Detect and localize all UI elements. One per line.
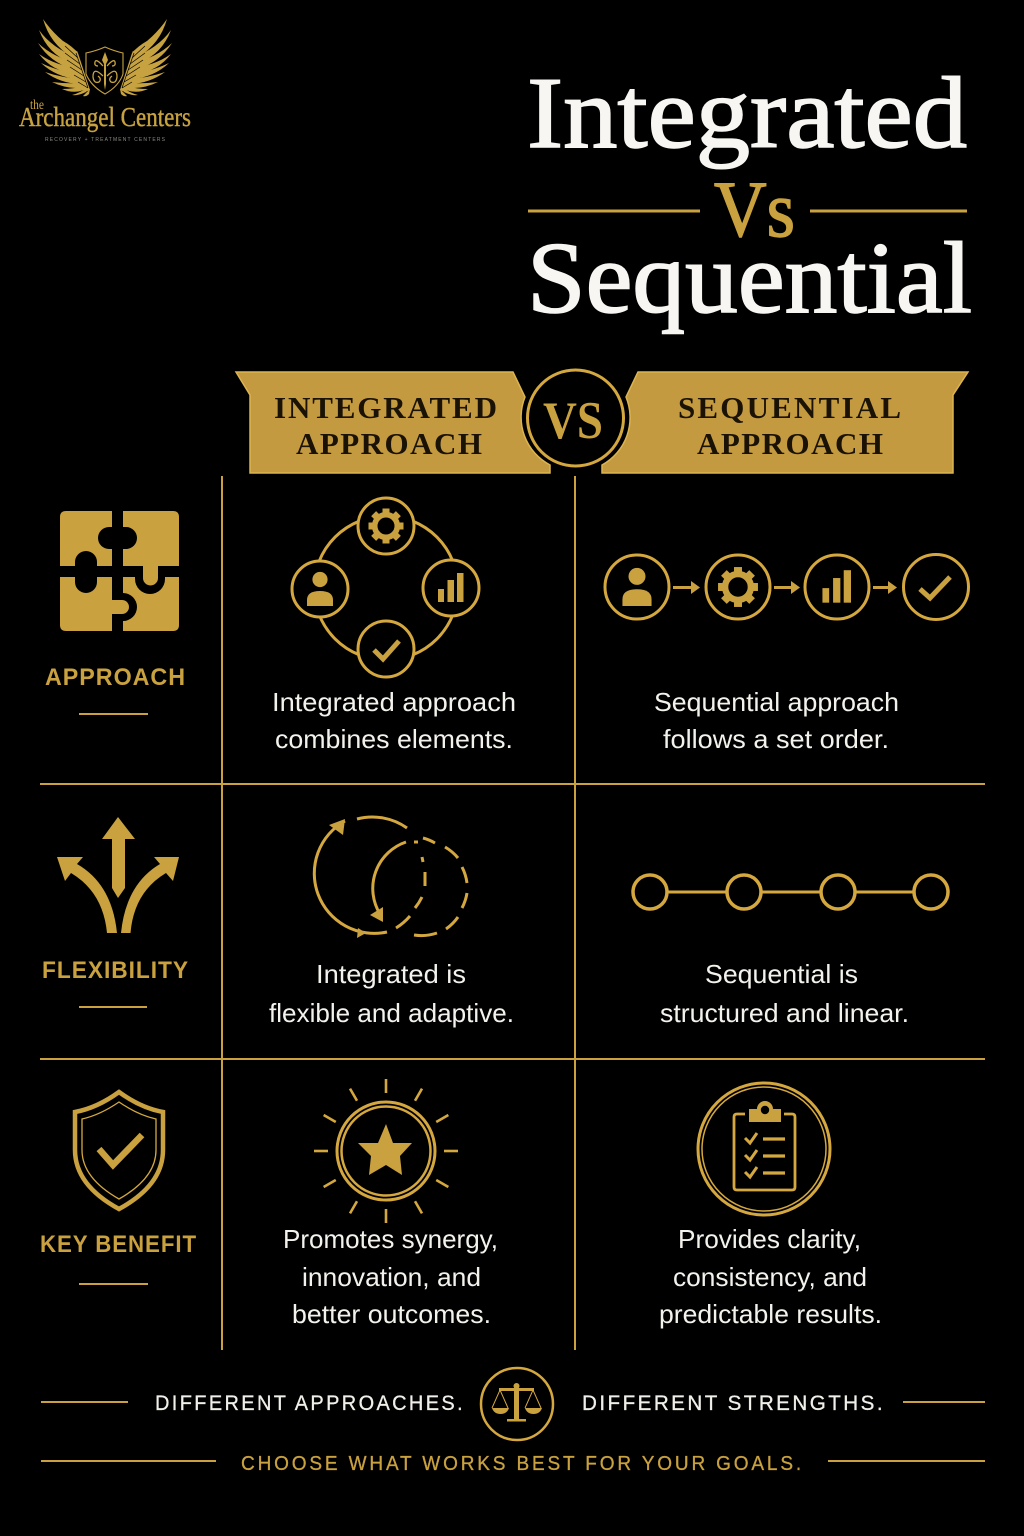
cell: sequential approach [605,554,968,754]
cell text: combines elements. [275,724,513,754]
label text: APPROACH [45,664,186,691]
cell: integrated benefit [283,1079,498,1329]
icon: radiant star [314,1079,458,1223]
header banner: sequential approach [602,372,968,473]
icon: shield with check [75,1092,163,1209]
cell text: Integrated approach [272,687,516,717]
icon: puzzle [60,511,179,631]
icon: clipboard checklist [698,1083,830,1215]
title word: Vs: Vs [714,167,795,254]
row label: approach [45,511,186,714]
logo: The Archangel Centers [19,19,191,143]
cell: sequential benefit [659,1083,882,1329]
cell text [272,687,516,754]
cell text: Integrated is [316,959,466,989]
cell text: predictable results. [659,1299,882,1329]
logo wordmark: Archangel Centers [19,102,191,132]
title word: Integrated: Integrated [527,57,967,170]
icon: overlapping cycles [314,817,467,938]
cell text [660,959,909,1028]
cell text: follows a set order. [663,724,889,754]
header banner: sequential approach: SEQUENTIAL [678,390,901,425]
cell text: structured and linear. [660,998,909,1028]
tagline right: DIFFERENT STRENGTHS. [582,1392,885,1415]
icon: step sequence [605,554,968,620]
icon: linear timeline [633,875,948,909]
cell text: Provides clarity, [678,1224,861,1254]
row label: flexibility [42,817,189,1007]
cell text: Promotes synergy, [283,1224,498,1254]
cell text: better outcomes. [292,1299,491,1329]
label text: FLEXIBILITY [42,957,189,984]
VS badge [528,370,624,466]
title [527,57,972,335]
icon: branching arrows [57,817,179,933]
logo shield [86,47,123,94]
header banner: sequential approach: APPROACH [697,426,883,461]
label rule [79,713,148,715]
cell text: flexible and adaptive. [269,998,514,1028]
row label: key benefit [40,1092,197,1284]
VS badge: VS [543,392,603,450]
cell text [283,1224,498,1329]
cell text [654,687,899,754]
title rule right [810,210,967,212]
cell text [269,959,514,1028]
logo wordmark: the [30,98,44,113]
cell: integrated flexibility [269,817,514,1028]
tagline left: DIFFERENT APPROACHES. [155,1392,465,1415]
footer tagline [41,1368,985,1475]
cell text: Sequential is [705,959,858,989]
title rule left [528,210,700,212]
cell: integrated approach [272,498,516,754]
header banner: integrated approach [236,372,550,473]
title word: Sequential: Sequential [527,222,972,335]
logo wings [38,19,172,96]
comparison grid lines [40,476,985,1350]
logo wordmark: RECOVERY + TREATMENT CENTERS [45,137,166,143]
closing line: CHOOSE WHAT WORKS BEST FOR YOUR GOALS. [241,1453,804,1475]
header banner: integrated approach: APPROACH [296,426,482,461]
label rule [79,1006,147,1008]
logo wordmark [19,98,191,143]
label text: KEY BENEFIT [40,1231,197,1258]
cell text: Sequential approach [654,687,899,717]
icon: balance scale [481,1368,553,1440]
cell text [659,1224,882,1329]
cell: sequential flexibility [633,875,948,1028]
label rule [79,1283,148,1285]
cell text: innovation, and [302,1262,481,1292]
icon: connected circle [292,498,479,677]
header banner: integrated approach: INTEGRATED [274,390,497,425]
cell text: consistency, and [673,1262,867,1292]
